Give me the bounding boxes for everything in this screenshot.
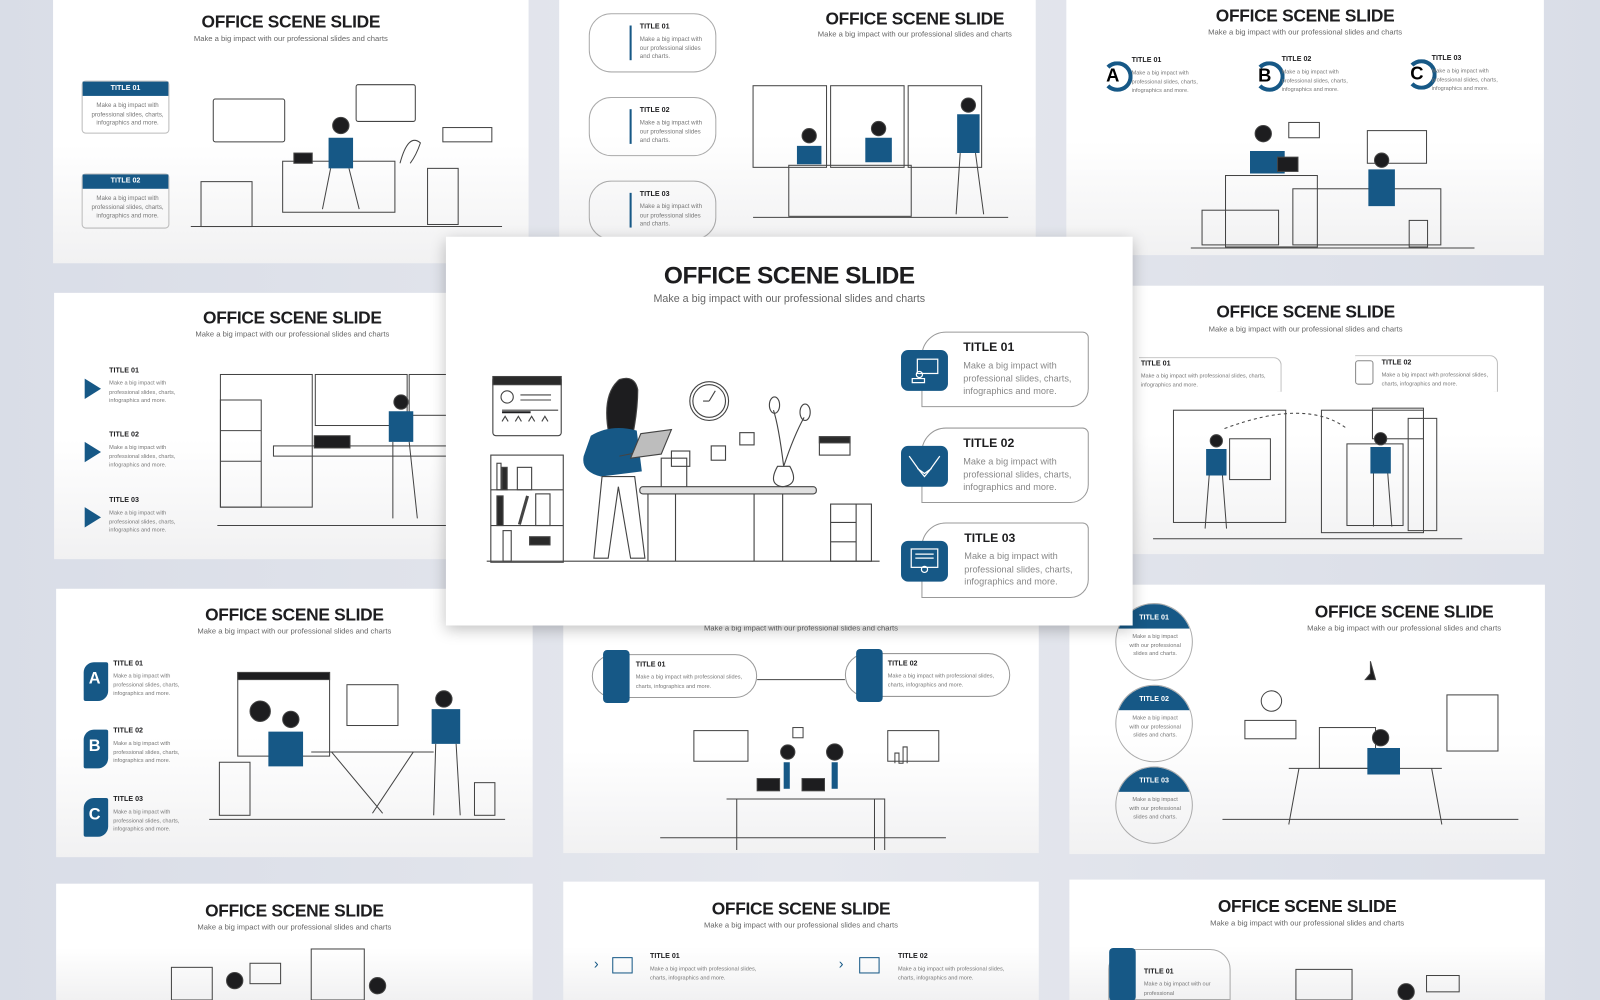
item: title 02 <box>1355 355 1498 392</box>
list: A B C blocks <box>84 660 179 837</box>
subtitle: Make a big impact with our professional slides and charts <box>197 922 391 932</box>
illustration: office windows <box>752 85 1008 218</box>
title: OFFICE SCENE SLIDE <box>202 12 380 32</box>
slide: bottom-mid right <box>1069 585 1545 854</box>
slide: middle left <box>54 293 483 559</box>
subtitle: Make a big impact with our professional slides and charts <box>704 920 898 930</box>
slide: bottom left (partial) <box>56 884 533 1000</box>
list: three rounded items: TITLE 01 <box>640 23 670 31</box>
list: three rounded items: Make a big impact with our professional slides and charts. <box>640 37 702 60</box>
slide: bottom center (partial) <box>563 882 1039 1000</box>
illustration: partial <box>1295 968 1460 1000</box>
illustration: desk worker <box>1222 661 1518 825</box>
icon: certificate <box>910 548 938 573</box>
item B: TITLE 02 <box>1282 56 1311 63</box>
subtitle: Make a big impact with our professional slides and charts <box>1307 623 1501 633</box>
pill: title 01 <box>592 654 757 698</box>
slide: top right <box>1066 0 1544 255</box>
item: title 02 <box>839 953 1004 981</box>
slide: top left <box>53 0 529 263</box>
timeline: circles <box>1115 603 1193 844</box>
illustration: woman with laptop in office <box>486 376 880 563</box>
list: A B C blocks: TITLE 01 <box>113 660 143 667</box>
card: title 01 <box>901 332 1089 408</box>
card: title 03 <box>901 522 1089 598</box>
item A: Make a big impact with professional slides, charts, infographics and more. <box>1132 70 1198 94</box>
item: title 02: Make a big impact with professional slides, charts, infographics and more. <box>1382 372 1488 387</box>
timeline: circles: TITLE 03 <box>1139 778 1169 785</box>
title: OFFICE SCENE SLIDE <box>1218 897 1396 916</box>
item: title 01 <box>1108 949 1231 1000</box>
timeline: circles: TITLE 01 <box>1139 614 1169 621</box>
item: title 01: › <box>594 955 599 971</box>
item C: C <box>1410 63 1423 84</box>
card: title 02: TITLE 02 <box>963 436 1014 450</box>
item: title 02: TITLE 02 <box>1382 359 1411 366</box>
item A: TITLE 01 <box>1132 57 1161 64</box>
item A: A <box>1106 65 1119 86</box>
main slide: center <box>446 237 1133 626</box>
illustration: desk scene <box>190 84 502 228</box>
list: three rounded items <box>588 13 716 237</box>
card: title 02: Make a big impact with professional slides, charts, infographics and more. <box>963 456 1071 492</box>
list: A B C blocks: TITLE 02 <box>113 728 143 735</box>
subtitle: Make a big impact with our professional slides and charts <box>197 627 391 636</box>
card: title 02: Make a big impact with professional slides, charts, infographics and more. <box>91 196 164 219</box>
pill: title 01: TITLE 01 <box>636 661 665 668</box>
item: title 01: TITLE 01 <box>1144 968 1174 976</box>
item: title 01 <box>594 953 756 981</box>
timeline: circles: TITLE 02 <box>1139 696 1169 703</box>
list: A B C blocks: Make a big impact with professional slides, charts, infographics and more. <box>113 741 179 764</box>
item B: Make a big impact with professional slides, charts, infographics and more. <box>1282 69 1348 93</box>
list: A B C blocks: B <box>89 738 101 755</box>
slide: bottom-mid left (A B C) <box>56 589 533 857</box>
illustration: partial <box>170 948 386 1000</box>
card: title 01: TITLE 01 <box>963 340 1014 354</box>
list: triangles: TITLE 02 <box>109 432 139 439</box>
illustration: printing room <box>1153 408 1462 540</box>
card: title 01: TITLE 01 <box>111 85 140 92</box>
timeline: circles: Make a big impact with our professional slides and charts. <box>1129 634 1181 657</box>
subtitle: Make a big impact with our professional slides and charts <box>1209 324 1403 334</box>
item: title 01: TITLE 01 <box>650 953 680 960</box>
item C: Make a big impact with professional slides, charts, infographics and more. <box>1432 68 1498 92</box>
illustration: filing room <box>217 374 446 526</box>
illustration: two at desk <box>660 679 946 850</box>
list: A B C blocks: Make a big impact with professional slides, charts, infographics and more. <box>113 809 179 833</box>
item: title 01 <box>1139 357 1282 392</box>
list: A B C blocks: TITLE 03 <box>113 796 143 803</box>
list: A B C blocks: Make a big impact with professional slides, charts, infographics and more. <box>113 673 179 697</box>
item C <box>1410 55 1498 92</box>
list: A B C blocks: C <box>89 806 101 823</box>
card: title 01: Make a big impact with professional slides, charts, infographics and more. <box>91 103 164 127</box>
slide: top middle <box>559 0 1036 245</box>
card: title 02: TITLE 02 <box>111 178 140 185</box>
illustration: two workers <box>1190 122 1474 248</box>
item: title 02: TITLE 02 <box>898 953 928 960</box>
icon: presentation <box>912 358 938 384</box>
title: OFFICE SCENE SLIDE <box>1315 602 1493 621</box>
title: OFFICE SCENE SLIDE <box>825 9 1004 29</box>
list: triangles: Make a big impact with professional slides, charts, infographics and more. <box>109 381 175 404</box>
subtitle: Make a big impact with our professional slides and charts <box>194 34 388 43</box>
item: title 01: TITLE 01 <box>1141 360 1171 367</box>
title: OFFICE SCENE SLIDE <box>664 262 915 290</box>
subtitle: Make a big impact with our professional slides and charts <box>1208 28 1402 37</box>
list: triangles: TITLE 01 <box>109 367 139 374</box>
timeline: circles: Make a big impact with our professional slides and charts. <box>1129 797 1181 820</box>
list: three rounded items: Make a big impact with our professional slides and charts. <box>640 120 702 144</box>
icon: handshake <box>908 456 940 478</box>
pill: title 02 <box>845 653 1010 697</box>
pill: title 02: Make a big impact with professional slides, charts, infographics and more. <box>888 673 994 688</box>
title: OFFICE SCENE SLIDE <box>203 308 382 328</box>
illustration: presentation <box>209 672 506 820</box>
subtitle: Make a big impact with our professional slides and charts <box>195 330 389 339</box>
pill: title 01: Make a big impact with professional slides, charts, infographics and more. <box>636 674 742 689</box>
item: title 01: Make a big impact with professional slides, charts, infographics and more. <box>1141 373 1266 388</box>
card: title 02 <box>82 173 169 229</box>
item: title 01: Make a big impact with our professional <box>1144 982 1211 996</box>
item: title 02: Make a big impact with professional slides, charts, infographics and more. <box>898 966 1004 981</box>
card: title 03: TITLE 03 <box>964 531 1015 545</box>
item A <box>1106 57 1198 94</box>
subtitle: Make a big impact with our professional slides and charts <box>818 30 1012 39</box>
title: OFFICE SCENE SLIDE <box>1216 6 1394 26</box>
item B <box>1258 56 1348 93</box>
slide: bottom-mid center <box>563 626 1039 853</box>
title: OFFICE SCENE SLIDE <box>1216 302 1395 321</box>
list: triangles: Make a big impact with professional slides, charts, infographics and more. <box>109 445 175 468</box>
card: title 03: Make a big impact with professional slides, charts, infographics and more. <box>964 551 1073 587</box>
list: three rounded items: Make a big impact with our professional slides and charts. <box>640 204 702 228</box>
list: triangles: Make a big impact with professional slides, charts, infographics and more. <box>109 510 175 534</box>
item: title 02: › <box>839 955 844 971</box>
title: OFFICE SCENE SLIDE <box>205 605 384 624</box>
slide: bottom right (partial) <box>1069 880 1545 1000</box>
item C: TITLE 03 <box>1432 55 1461 62</box>
subtitle: Make a big impact with our professional slides and charts <box>1210 918 1404 928</box>
title: OFFICE SCENE SLIDE <box>205 901 384 920</box>
list: triangles <box>84 367 175 534</box>
list: A B C blocks: A <box>89 670 101 688</box>
list: triangles: TITLE 03 <box>109 497 139 504</box>
list: three rounded items: TITLE 02 <box>640 107 670 114</box>
item: title 01: Make a big impact with professional slides, charts, infographics and more. <box>650 966 756 981</box>
card: title 01 <box>82 81 169 134</box>
slide: middle right <box>1133 286 1544 554</box>
subtitle: Make a big impact with our professional slides and charts <box>653 293 925 305</box>
item B: B <box>1258 65 1271 86</box>
list: three rounded items: TITLE 03 <box>640 191 670 198</box>
timeline: circles: Make a big impact with our professional slides and charts. <box>1129 715 1181 739</box>
card: title 02 <box>901 428 1089 503</box>
pill: title 02: TITLE 02 <box>888 660 918 667</box>
card: title 01: Make a big impact with professional slides, charts, infographics and more. <box>963 360 1071 396</box>
title: OFFICE SCENE SLIDE <box>712 899 890 918</box>
